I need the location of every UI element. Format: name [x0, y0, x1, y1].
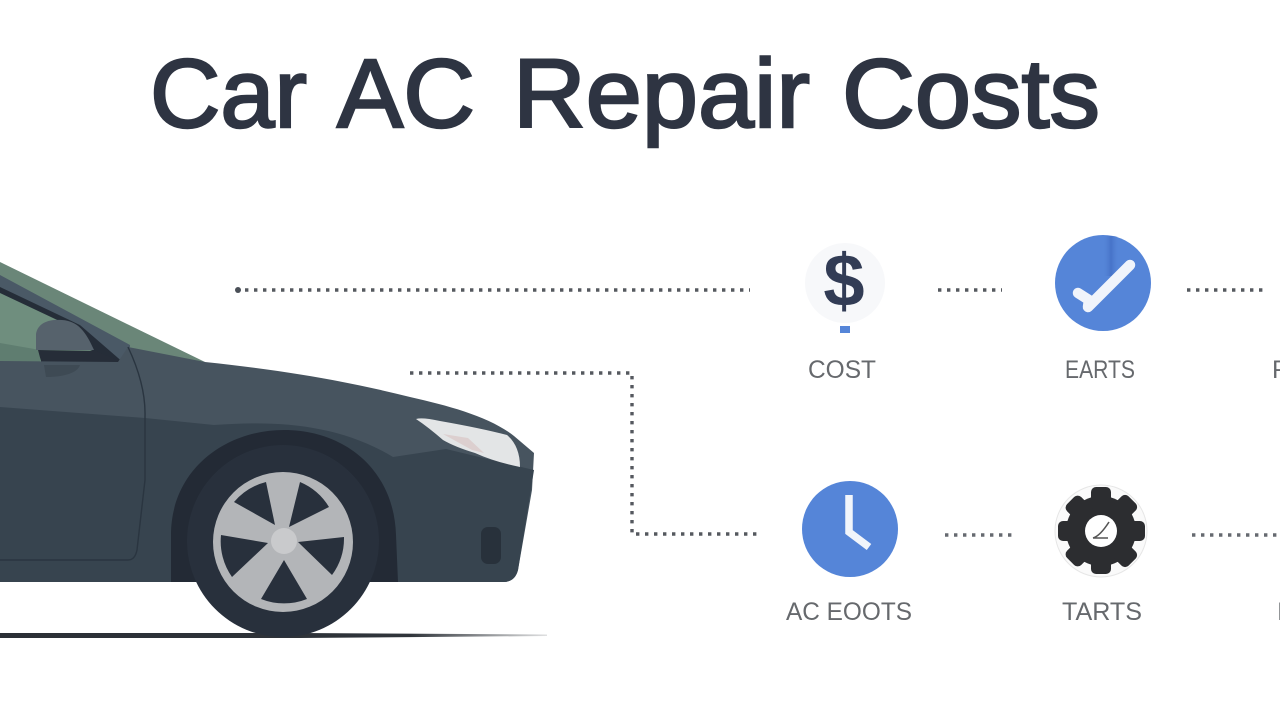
lower body shading [0, 407, 534, 582]
title: Repair [513, 39, 810, 148]
icon: dollar [805, 239, 885, 333]
side window [0, 289, 125, 365]
label: earts: EARTS [1065, 356, 1135, 384]
title: AC [337, 39, 475, 148]
connector: parts to next [1187, 288, 1268, 292]
connector: clock to gear [945, 533, 1013, 537]
mirror lower shadow [44, 365, 80, 377]
ground shadow [0, 633, 547, 638]
title: Car [150, 39, 307, 148]
rim [213, 472, 353, 612]
label: cost: COST [808, 356, 876, 384]
label: ac eoots: AC EOOTS [786, 598, 912, 626]
mirror dark band [38, 350, 128, 365]
icon: dollar: $ [823, 239, 865, 322]
title [150, 39, 1100, 148]
icon: clock [802, 481, 898, 577]
tire [187, 445, 379, 637]
connector: cost to parts [938, 288, 1002, 292]
icon: check [1055, 235, 1151, 331]
window lower strip [0, 343, 40, 362]
icon: gear [1055, 485, 1147, 577]
car body [0, 347, 534, 582]
A-pillar [0, 275, 130, 366]
windshield [0, 262, 205, 362]
headlight [416, 418, 520, 467]
hub [271, 528, 297, 554]
title: Costs [842, 39, 1100, 148]
mirror [36, 320, 94, 350]
wheel arch [171, 430, 398, 582]
front vent [481, 527, 501, 564]
wheel [187, 445, 379, 637]
connector: top dotted line [235, 287, 750, 293]
connector: elbow dotted line [410, 373, 758, 534]
connector: gear to next [1192, 533, 1280, 537]
pillar dark edge [0, 287, 125, 364]
door line [0, 347, 145, 560]
label: tarts: TARTS [1062, 598, 1142, 626]
spoke gaps [221, 482, 344, 603]
illustration: car [0, 262, 547, 638]
